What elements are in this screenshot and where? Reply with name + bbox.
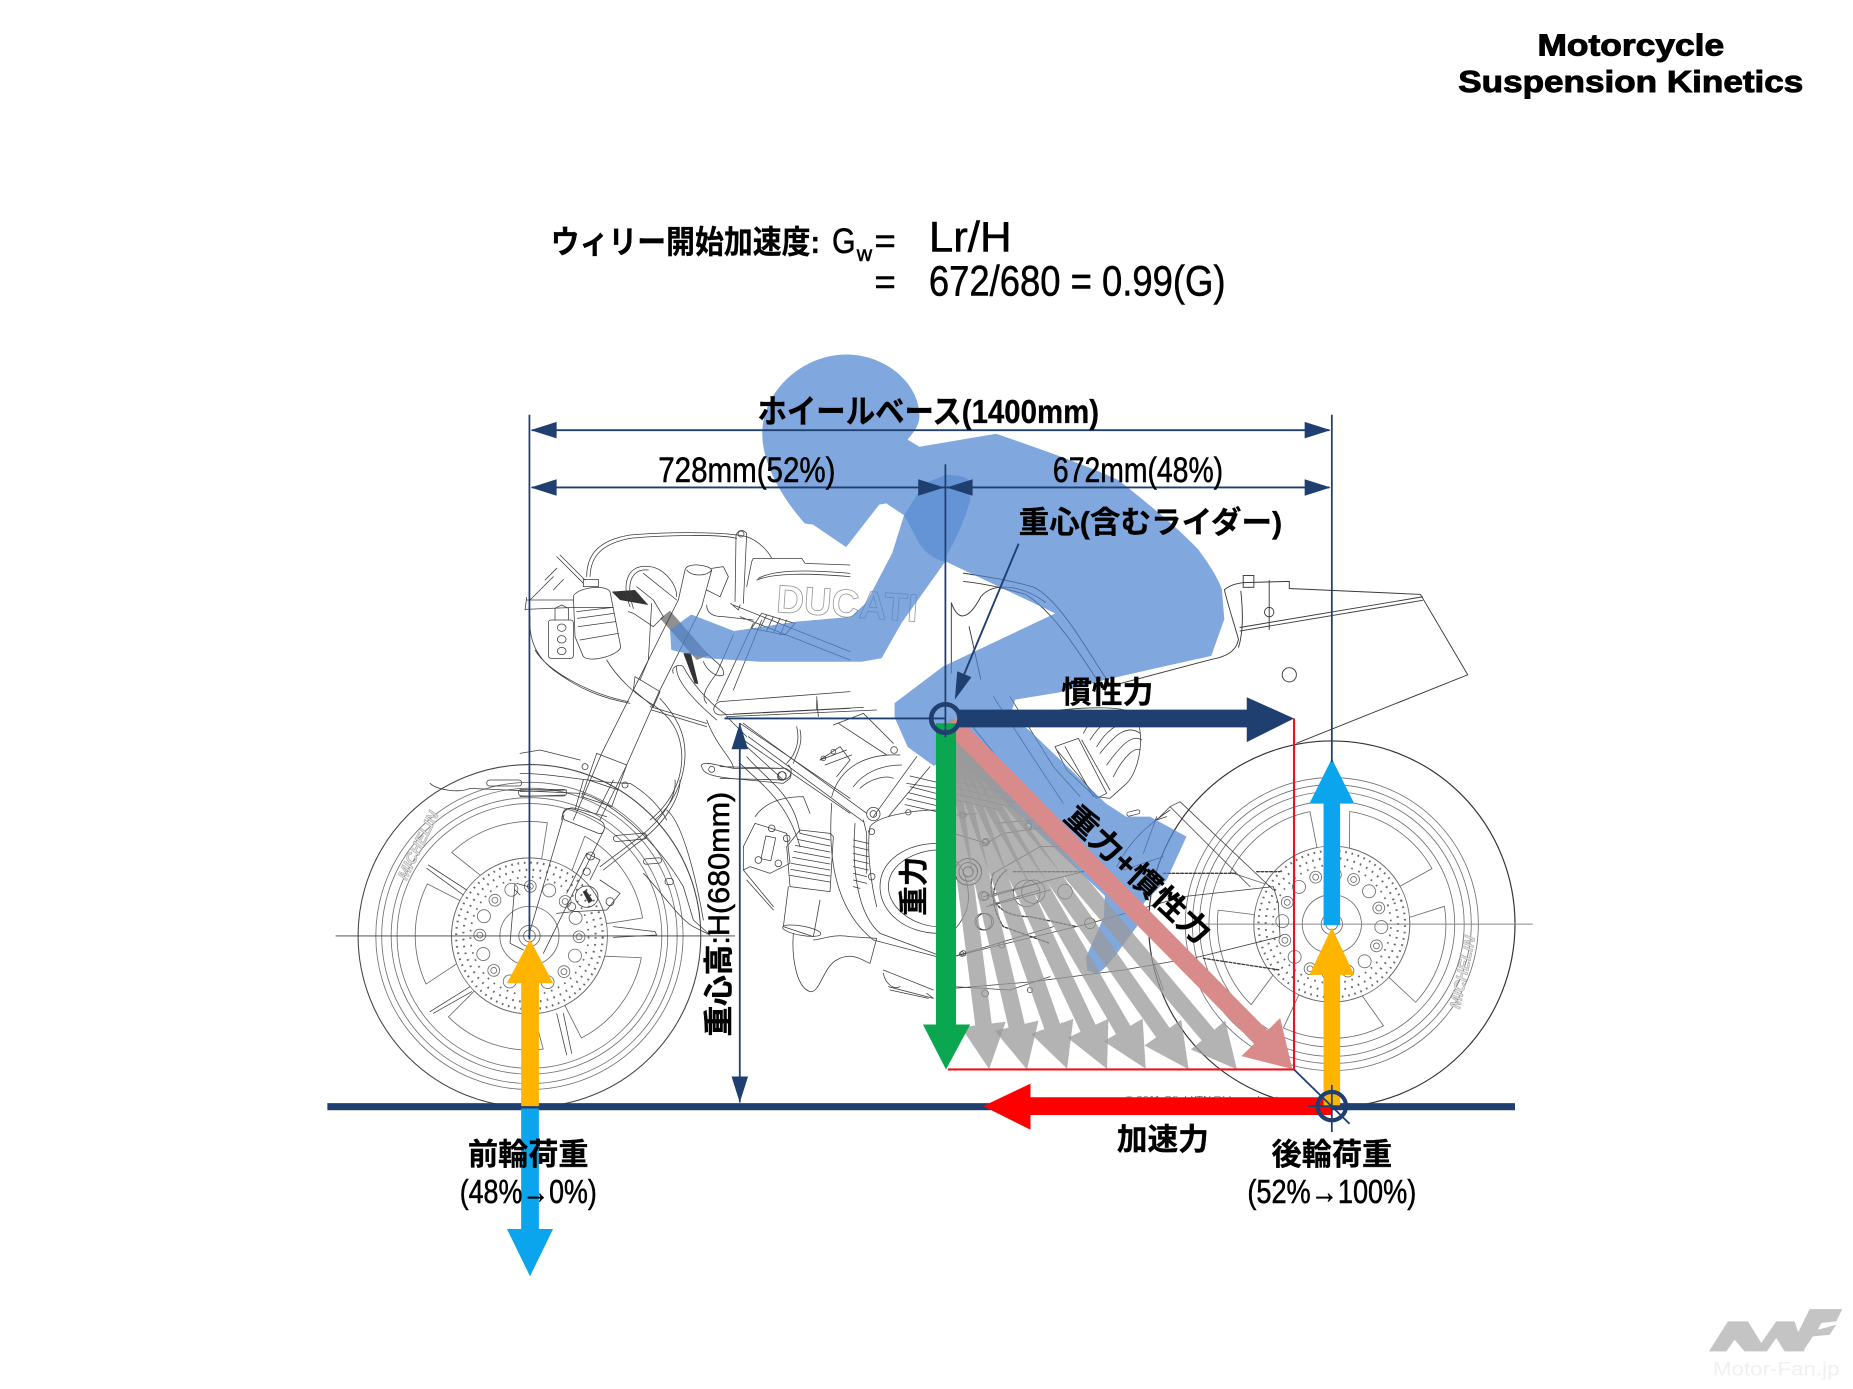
label: center of gravity: 重心(含むライダー) [1019, 505, 1282, 540]
formula: wheelie start acceleration: G [832, 221, 856, 261]
label: rear wheel load: 後輪荷重 [1272, 1137, 1392, 1172]
front hub, fork legs and caliper [427, 780, 710, 1055]
rear cylinder head, swingarm and chain [953, 697, 1280, 990]
DUCATI tank lettering: DUCATI [775, 578, 919, 631]
arrow: gravity + inertia resultant [932, 704, 1312, 1088]
label: rear wheel load [1247, 1137, 1416, 1211]
title [1458, 28, 1803, 99]
rider silhouette [670, 355, 1224, 974]
label: acceleration force: 加速力 [1117, 1122, 1209, 1157]
formula: wheelie start acceleration: = [875, 221, 896, 261]
logo: Motor-Fan.jp watermark [1709, 1309, 1842, 1381]
formula: wheelie start acceleration: Lr/H [929, 214, 1012, 262]
label: front distance: 728mm(52%) [658, 450, 836, 490]
logo: Motor-Fan.jp watermark: Motor-Fan.jp [1713, 1360, 1840, 1381]
label: center of gravity height: 重心高:H(680mm) [703, 792, 736, 1036]
formula: wheelie start acceleration: w [856, 242, 873, 266]
arrow: front wheel load reduction [507, 1108, 553, 1276]
gray fan of force arrows [923, 709, 1254, 1084]
force parallelogram red guide lines [948, 718, 1294, 1069]
engine, carburetor and exhaust [720, 700, 1053, 998]
dimension lines [529, 415, 1332, 1103]
motorcycle line drawing [336, 530, 1533, 1107]
label: rear distance: 672mm(48%) [1053, 450, 1223, 490]
label: front wheel load [460, 1137, 597, 1211]
label: gravity + inertia: 重力+慣性力 [1058, 798, 1218, 951]
arm and torso overlap [904, 475, 970, 561]
label: gravity: 重力 [898, 857, 931, 916]
arrow: acceleration force [983, 1084, 1332, 1130]
center of gravity marker and pointer [931, 544, 1019, 733]
copyright note: © 2011 Ofield/TN@blueprd.net [1125, 1095, 1279, 1105]
rear wheel [1142, 741, 1515, 1107]
ground line [327, 1103, 1515, 1110]
rear contact patch marker [1294, 1069, 1355, 1132]
arrow: rear wheel load [1309, 928, 1354, 1106]
label: inertia force: 慣性力 [1061, 675, 1153, 710]
label: rear wheel load: (52%→100%) [1247, 1174, 1416, 1211]
arrow: inertia force [960, 697, 1294, 742]
formula: wheelie start acceleration: ウィリー開始加速度: [551, 224, 820, 260]
label: front wheel load: (48%→0%) [460, 1174, 597, 1211]
formula: wheelie start acceleration: = [875, 262, 896, 302]
title: Suspension Kinetics [1458, 64, 1803, 99]
arrow: rear wheel load increase [1309, 759, 1354, 925]
tail section and seat [1113, 576, 1468, 743]
fuel tank top and tube lines [951, 573, 1111, 685]
cockpit, fork top, bottle and frame head [520, 530, 850, 820]
formula: wheelie start acceleration [551, 214, 1225, 305]
label: front wheel load: 前輪荷重 [468, 1137, 589, 1172]
title: Motorcycle [1537, 28, 1724, 63]
label: wheelbase: ホイールベース(1400mm) [758, 394, 1099, 431]
rear wheel: MICHELIN [1447, 933, 1479, 1010]
arrow: gravity [923, 723, 970, 1069]
formula: wheelie start acceleration: 672/680 = 0.99(G) [929, 257, 1225, 305]
front wheel: MICHELIN [395, 808, 443, 883]
wheel axis lines [336, 924, 1533, 936]
front wheel [358, 765, 701, 1107]
arrow: front wheel load [507, 939, 553, 1106]
